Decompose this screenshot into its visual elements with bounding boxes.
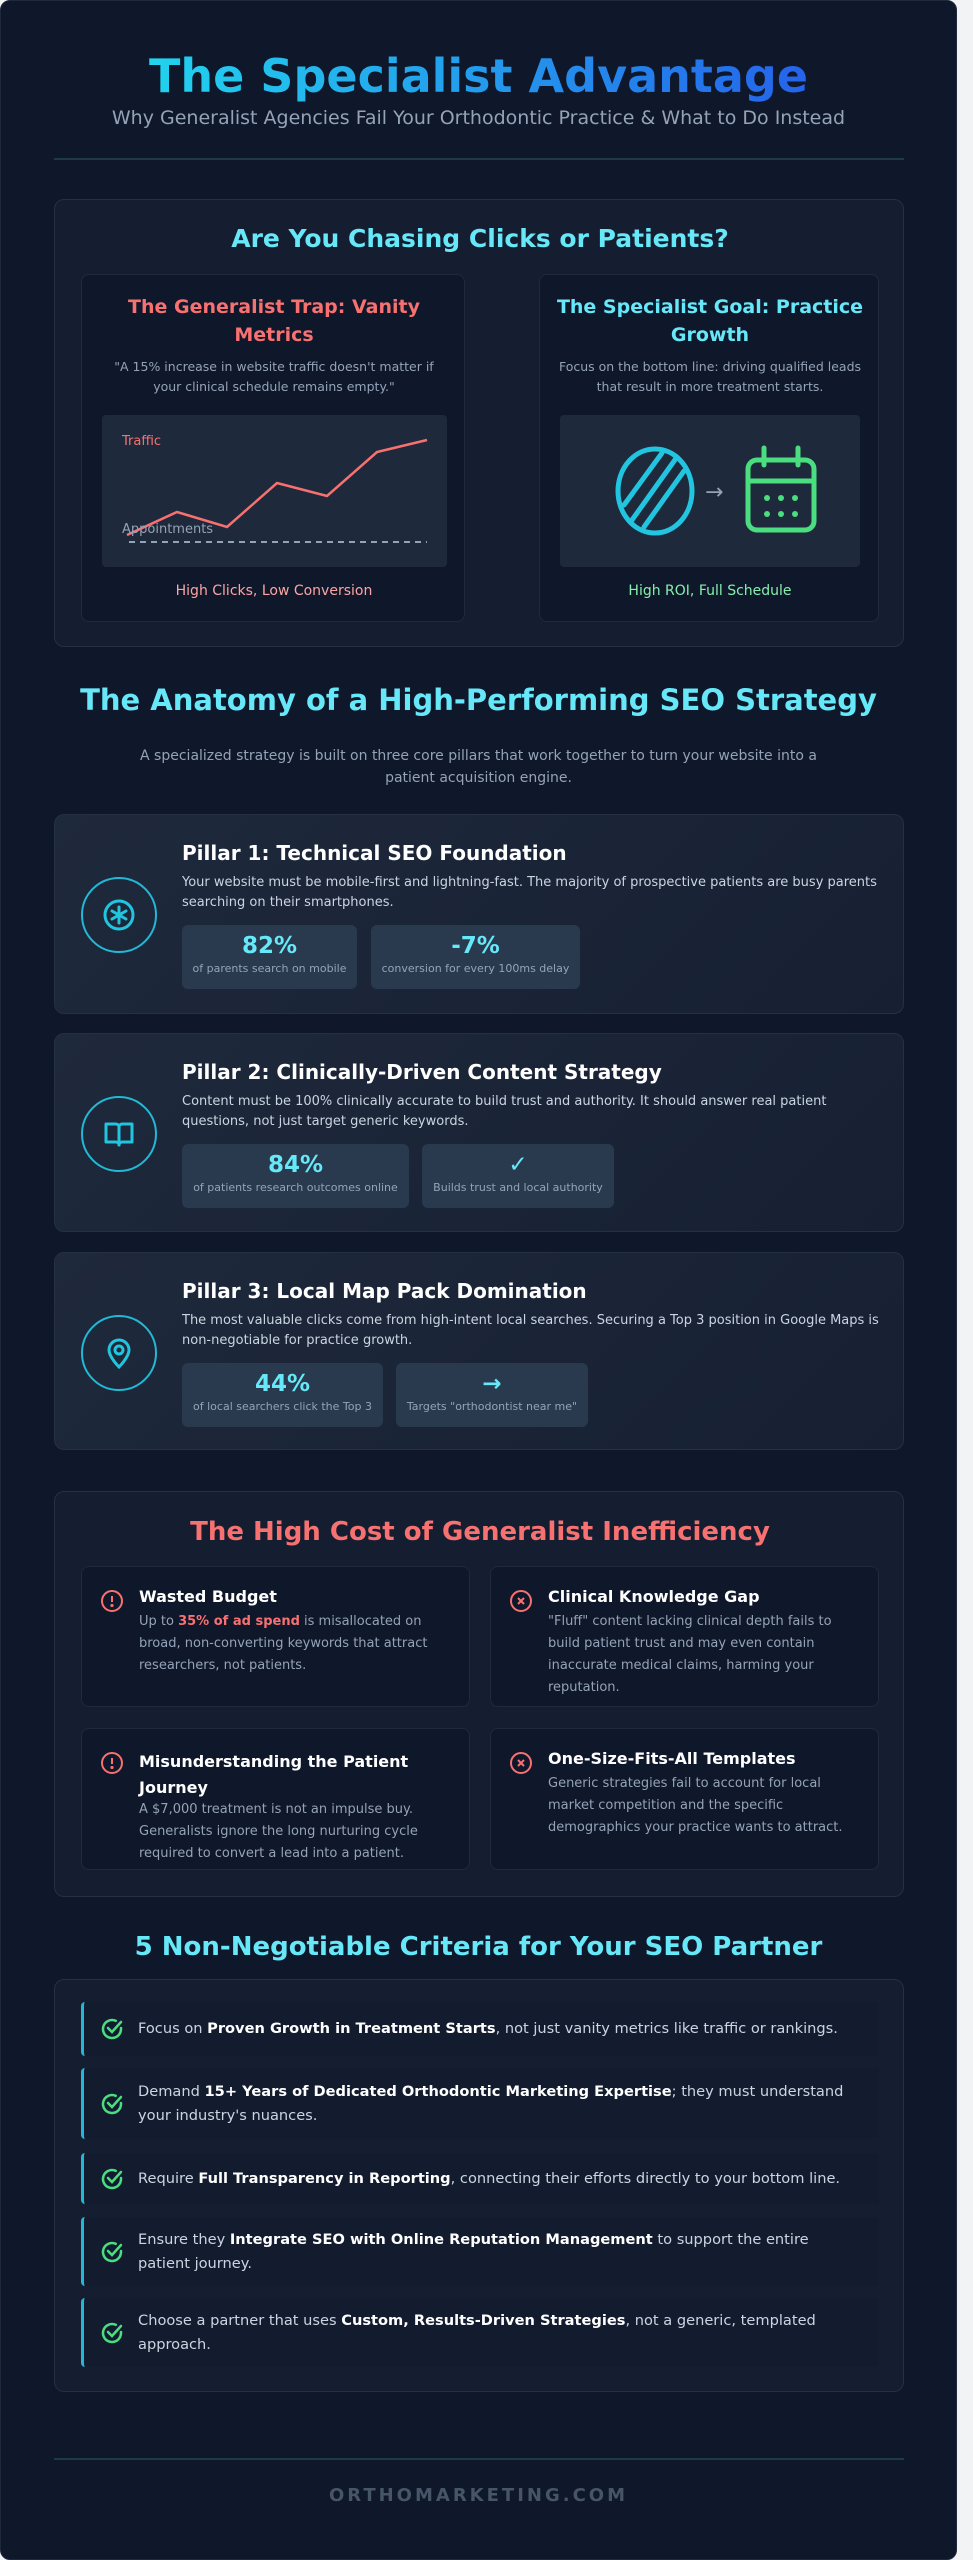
stat: trust: ✓ (508, 1152, 528, 1178)
stat: 82% (182, 925, 357, 989)
chart: traffic vs appointments: Traffic (121, 434, 161, 449)
heading: specialist goal: The Specialist Goal: Practice Growth (557, 296, 863, 346)
heading: generalist trap: The Generalist Trap: Vanity Metrics (128, 296, 420, 346)
stat: 84%: 84% (268, 1152, 323, 1178)
caption: high clicks: High Clicks, Low Conversion (176, 583, 372, 599)
text: pillar 3: The most valuable clicks come from high-intent local searches. Securing a Top 3 position in Google Maps is non-negotiable for practice growth. (182, 1313, 879, 1348)
heading: high cost: The High Cost of Generalist Inefficiency (190, 1517, 770, 1547)
panel: pillar 1 (54, 814, 904, 1014)
criterion 1: Focus on Proven Growth in Treatment Starts, not just vanity metrics like traffic or rankings. (138, 2020, 838, 2037)
text: focus: Focus on the bottom line: driving qualified leads that result in more treatment starts. (559, 359, 861, 394)
stat: trust: Builds trust and local authority (433, 1181, 603, 1194)
card: templates: One-Size-Fits-All Templates (548, 1749, 796, 1768)
criterion 3 (81, 2153, 879, 2204)
criterion 2 (81, 2068, 879, 2139)
stat: 84%: of patients research outcomes online (193, 1181, 398, 1194)
subtitle: Why Generalist Agencies Fail Your Orthodontic Practice & What to Do Instead (112, 107, 845, 129)
card: wasted budget: Up to 35% of ad spend is misallocated on broad, non-converting keywords that attract researchers, not patients. (139, 1614, 427, 1673)
panel: pillar 2 (54, 1033, 904, 1232)
panel: criteria list (54, 1979, 904, 2392)
icon: map pin (81, 1315, 157, 1391)
stat: -7%: -7% (451, 933, 500, 959)
stat: 82%: of parents search on mobile (193, 962, 346, 975)
criterion 5 (81, 2298, 879, 2367)
panel: pillar 3 (54, 1252, 904, 1450)
criterion 3: Require Full Transparency in Reporting, connecting their efforts directly to your bottom line. (138, 2170, 840, 2186)
card: patient journey: A $7,000 treatment is not an impulse buy. Generalists ignore the long nurturing cycle required to convert a lead into a patient. (139, 1802, 418, 1861)
criterion 4 (81, 2217, 879, 2286)
card: wasted budget: Wasted Budget (139, 1587, 277, 1606)
stat: 82%: 82% (242, 933, 297, 959)
quote: "A 15% increase in website traffic doesn't matter if your clinical schedule remains empty." (114, 359, 434, 394)
heading: anatomy: The Anatomy of a High-Performing SEO Strategy (80, 683, 877, 717)
chart: traffic vs appointments: Appointments (122, 522, 213, 537)
panel: high cost (54, 1491, 904, 1897)
title: The Specialist Advantage (149, 49, 808, 103)
chart: traffic vs appointments (102, 415, 447, 567)
text: anatomy intro: A specialized strategy is built on three core pillars that work together to turn your website into a patient acquisition engine. (140, 748, 817, 786)
stat: targets: → (482, 1371, 502, 1397)
text: pillar 1: Your website must be mobile-first and lightning-fast. The majority of prospective patients are busy parents searching on their smartphones. (182, 875, 877, 910)
title: pillar 2: Pillar 2: Clinically-Driven Content Strategy (182, 1060, 662, 1084)
stat: 44% (182, 1363, 383, 1427)
panel: clicks vs patients (54, 199, 904, 647)
card: wasted budget (81, 1566, 470, 1707)
card: clinical gap: "Fluff" content lacking clinical depth fails to build patient trust and may even contain inaccurate medical claims, harming your reputation. (548, 1614, 832, 1695)
caption: high roi: High ROI, Full Schedule (628, 583, 792, 599)
text: pillar 2: Content must be 100% clinically accurate to build trust and authority. It should answer real patient questions, not just target generic keywords. (182, 1094, 826, 1129)
icons: tooth to calendar: → (705, 480, 723, 505)
icon: asterisk (81, 877, 157, 953)
card: templates (490, 1728, 879, 1870)
title: pillar 3: Pillar 3: Local Map Pack Domination (182, 1279, 587, 1303)
card: patient journey (81, 1728, 470, 1870)
card: templates: Generic strategies fail to account for local market competition and the specific demographics your practice wants to attract. (548, 1776, 843, 1835)
icons: tooth to calendar (560, 415, 860, 567)
icon: book (81, 1096, 157, 1172)
stat: targets: Targets "orthodontist near me" (407, 1400, 577, 1413)
criterion 5: Choose a partner that uses Custom, Results-Driven Strategies, not a generic, templated approach. (138, 2312, 816, 2352)
card: generalist trap (81, 274, 465, 622)
stat: 84% (182, 1144, 409, 1208)
footer: ORTHOMARKETING.COM (329, 2485, 628, 2506)
heading: clicks or patients: Are You Chasing Clicks or Patients? (231, 224, 729, 253)
criterion 4: Ensure they Integrate SEO with Online Reputation Management to support the entire patient journey. (138, 2230, 809, 2272)
card: specialist goal (539, 274, 879, 622)
stat: 44%: 44% (255, 1371, 310, 1397)
criterion 2: Demand 15+ Years of Dedicated Orthodontic Marketing Expertise; they must understand your industry's nuances. (138, 2082, 843, 2124)
criterion 1 (81, 2002, 879, 2056)
stat: -7% (371, 925, 580, 989)
card: clinical gap (490, 1566, 879, 1707)
card: patient journey: Misunderstanding the Patient Journey (139, 1752, 408, 1797)
stat: 44%: of local searchers click the Top 3 (193, 1400, 372, 1413)
heading: criteria: 5 Non-Negotiable Criteria for Your SEO Partner (135, 1932, 822, 1962)
title: pillar 1: Pillar 1: Technical SEO Foundation (182, 841, 567, 865)
stat: trust (422, 1144, 614, 1208)
stat: targets (396, 1363, 588, 1427)
stat: -7%: conversion for every 100ms delay (382, 962, 569, 975)
card: clinical gap: Clinical Knowledge Gap (548, 1587, 760, 1606)
